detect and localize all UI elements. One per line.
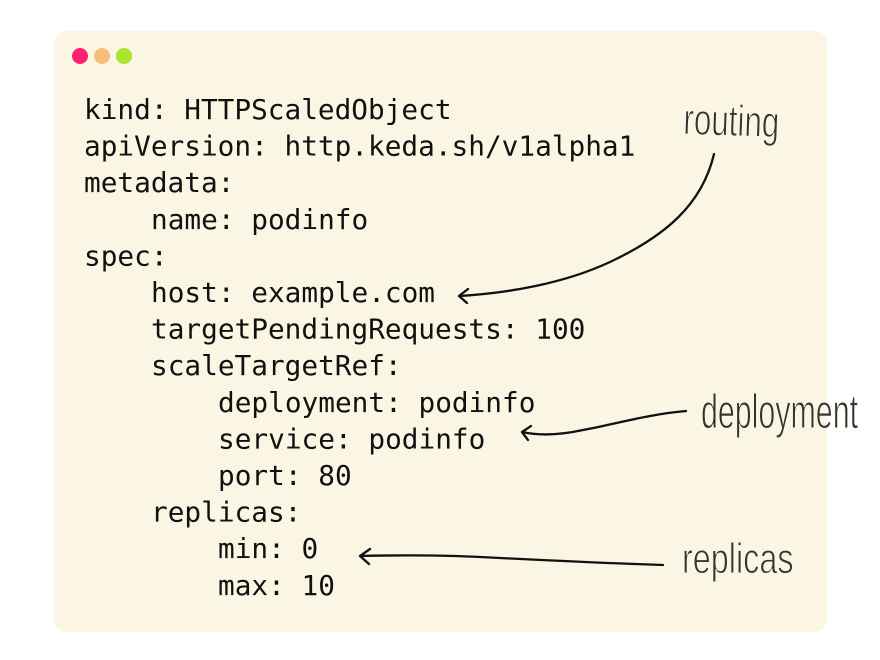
code block: YAML manifest: replicas:	[151, 496, 301, 529]
code block: YAML manifest: name: podinfo	[151, 203, 368, 236]
annotation: routing: routing	[683, 95, 780, 148]
arrow: replicas to min	[360, 549, 663, 565]
code block: YAML manifest: host: example.com	[151, 276, 435, 309]
code block: YAML manifest: kind: HTTPScaledObject	[84, 93, 452, 126]
annotation: deployment: deployment	[701, 385, 858, 439]
code block: YAML manifest: apiVersion: http.keda.sh/v1alpha1	[84, 130, 635, 163]
code block: YAML manifest: scaleTargetRef:	[151, 349, 402, 382]
panel: code window	[54, 31, 827, 632]
window controls	[72, 48, 132, 64]
code block: YAML manifest: metadata:	[84, 166, 234, 199]
annotation: replicas: replicas	[682, 536, 794, 583]
code block: YAML manifest: service: podinfo	[218, 422, 485, 455]
code block: YAML manifest	[84, 93, 635, 602]
code block: YAML manifest: deployment: podinfo	[218, 386, 535, 419]
code block: YAML manifest: spec:	[84, 239, 168, 272]
code block: YAML manifest: port: 80	[218, 459, 352, 492]
arrow: deployment to service	[522, 411, 686, 440]
code block: YAML manifest: max: 10	[218, 569, 335, 602]
code block: YAML manifest: min: 0	[218, 532, 318, 565]
code block: YAML manifest: targetPendingRequests: 100	[151, 313, 585, 346]
arrow: routing to host	[459, 154, 714, 303]
